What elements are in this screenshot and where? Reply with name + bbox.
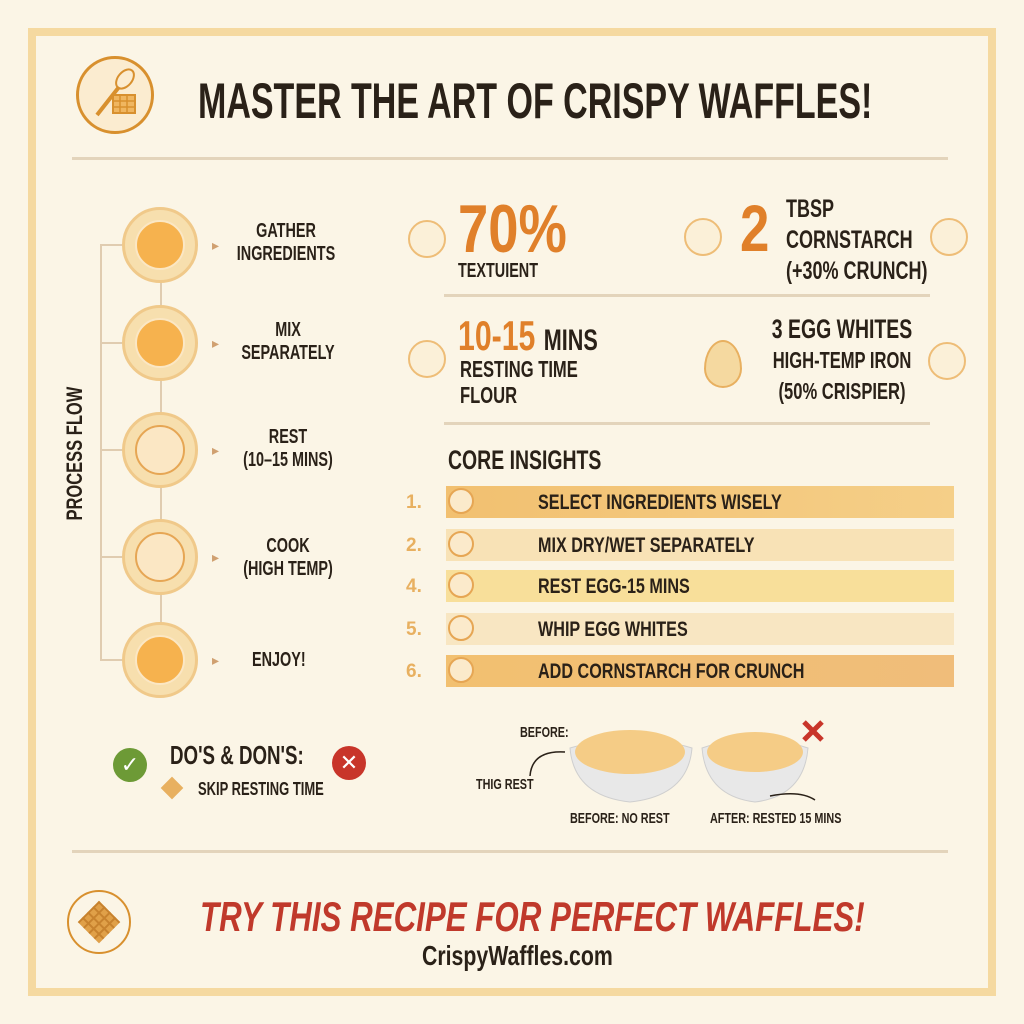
illustration: batter bowls: THIG REST	[476, 776, 534, 793]
step 4: COOK	[266, 535, 310, 557]
list: core insights: MIX DRY/WET SEPARATELY	[538, 534, 755, 557]
illustration: batter bowls: BEFORE:	[520, 724, 569, 741]
step 1: GATHER	[256, 220, 316, 242]
panel: do's and don'ts: ✕	[340, 750, 358, 775]
step 2: MIX	[275, 319, 301, 341]
panel: do's and don'ts: SKIP RESTING TIME	[198, 779, 324, 799]
stat: 70%: TEXTUIENT	[458, 260, 538, 282]
stat: 10-15 mins: 10-15 MINS	[458, 312, 598, 359]
list: core insights: SELECT INGREDIENTS WISELY	[538, 491, 782, 514]
step 1: INGREDIENTS	[237, 243, 335, 265]
stat: 10-15 mins: RESTING TIME	[460, 356, 578, 382]
stat: 3 egg whites: (50% CRISPIER)	[779, 378, 905, 404]
step 1	[100, 207, 335, 283]
stat: 70%: 70%	[458, 191, 567, 267]
call to action: TRY THIS RECIPE FOR PERFECT WAFFLES!	[200, 893, 865, 940]
stat: 10-15 mins	[408, 312, 598, 408]
list: core insights: REST EGG-15 MINS	[538, 575, 690, 598]
step 5: ▸	[212, 652, 219, 668]
list: core insights: 5.	[406, 619, 422, 640]
list: core insights: 1.	[406, 492, 422, 513]
panel: do's and don'ts: DO'S & DON'S:	[170, 740, 304, 770]
list: core insights: WHIP EGG WHITES	[538, 618, 688, 641]
list: core insights: 6.	[406, 661, 422, 682]
heading: core insights: CORE INSIGHTS	[448, 445, 601, 475]
website: CrispyWaffles.com	[422, 940, 613, 971]
step 3	[102, 412, 333, 488]
stat: 3 egg whites: 3 EGG WHITES	[772, 314, 912, 344]
stat: 2 tbsp	[684, 191, 968, 285]
list: core insights: ADD CORNSTARCH FOR CRUNCH	[538, 660, 804, 683]
illustration: batter bowls: AFTER: RESTED 15 MINS	[710, 810, 841, 827]
panel: do's and don'ts	[113, 740, 366, 800]
step 4: (HIGH TEMP)	[243, 558, 333, 580]
icon: whisk and waffle logo	[76, 56, 154, 134]
stat: 2 tbsp: TBSP	[786, 195, 834, 223]
label: process flow vertical: PROCESS FLOW	[62, 387, 87, 520]
stat: 2 tbsp: (+30% CRUNCH)	[786, 257, 928, 285]
stat: 10-15 mins: FLOUR	[460, 382, 517, 408]
step 3: ▸	[212, 442, 219, 458]
step 2: ▸	[212, 335, 219, 351]
icon: waffle badge	[67, 890, 131, 954]
list: core insights	[406, 486, 954, 687]
step 5: ENJOY!	[252, 649, 306, 671]
title: MASTER THE ART OF CRISPY WAFFLES!	[198, 73, 872, 129]
stat: 3 egg whites: HIGH-TEMP IRON	[773, 347, 911, 373]
list: core insights: 2.	[406, 535, 422, 556]
stat: 2 tbsp: CORNSTARCH	[786, 226, 913, 254]
step 3: REST	[269, 426, 307, 448]
list: core insights: 4.	[406, 576, 422, 597]
step 1: ▸	[212, 237, 219, 253]
panel: process flow	[62, 207, 335, 698]
step 2: SEPARATELY	[241, 342, 335, 364]
illustration: batter bowls: BEFORE: NO REST	[570, 810, 670, 827]
step 4: ▸	[212, 549, 219, 565]
illustration: batter bowls	[476, 720, 841, 827]
step 4	[102, 519, 333, 595]
panel: do's and don'ts: ✓	[121, 752, 139, 777]
stat: 2 tbsp: 2	[740, 191, 769, 265]
step 2	[102, 305, 335, 381]
stat: 3 egg whites	[704, 314, 966, 404]
step 3: (10–15 MINS)	[243, 449, 333, 471]
stat: 70%	[408, 191, 567, 282]
step 5	[100, 622, 306, 698]
